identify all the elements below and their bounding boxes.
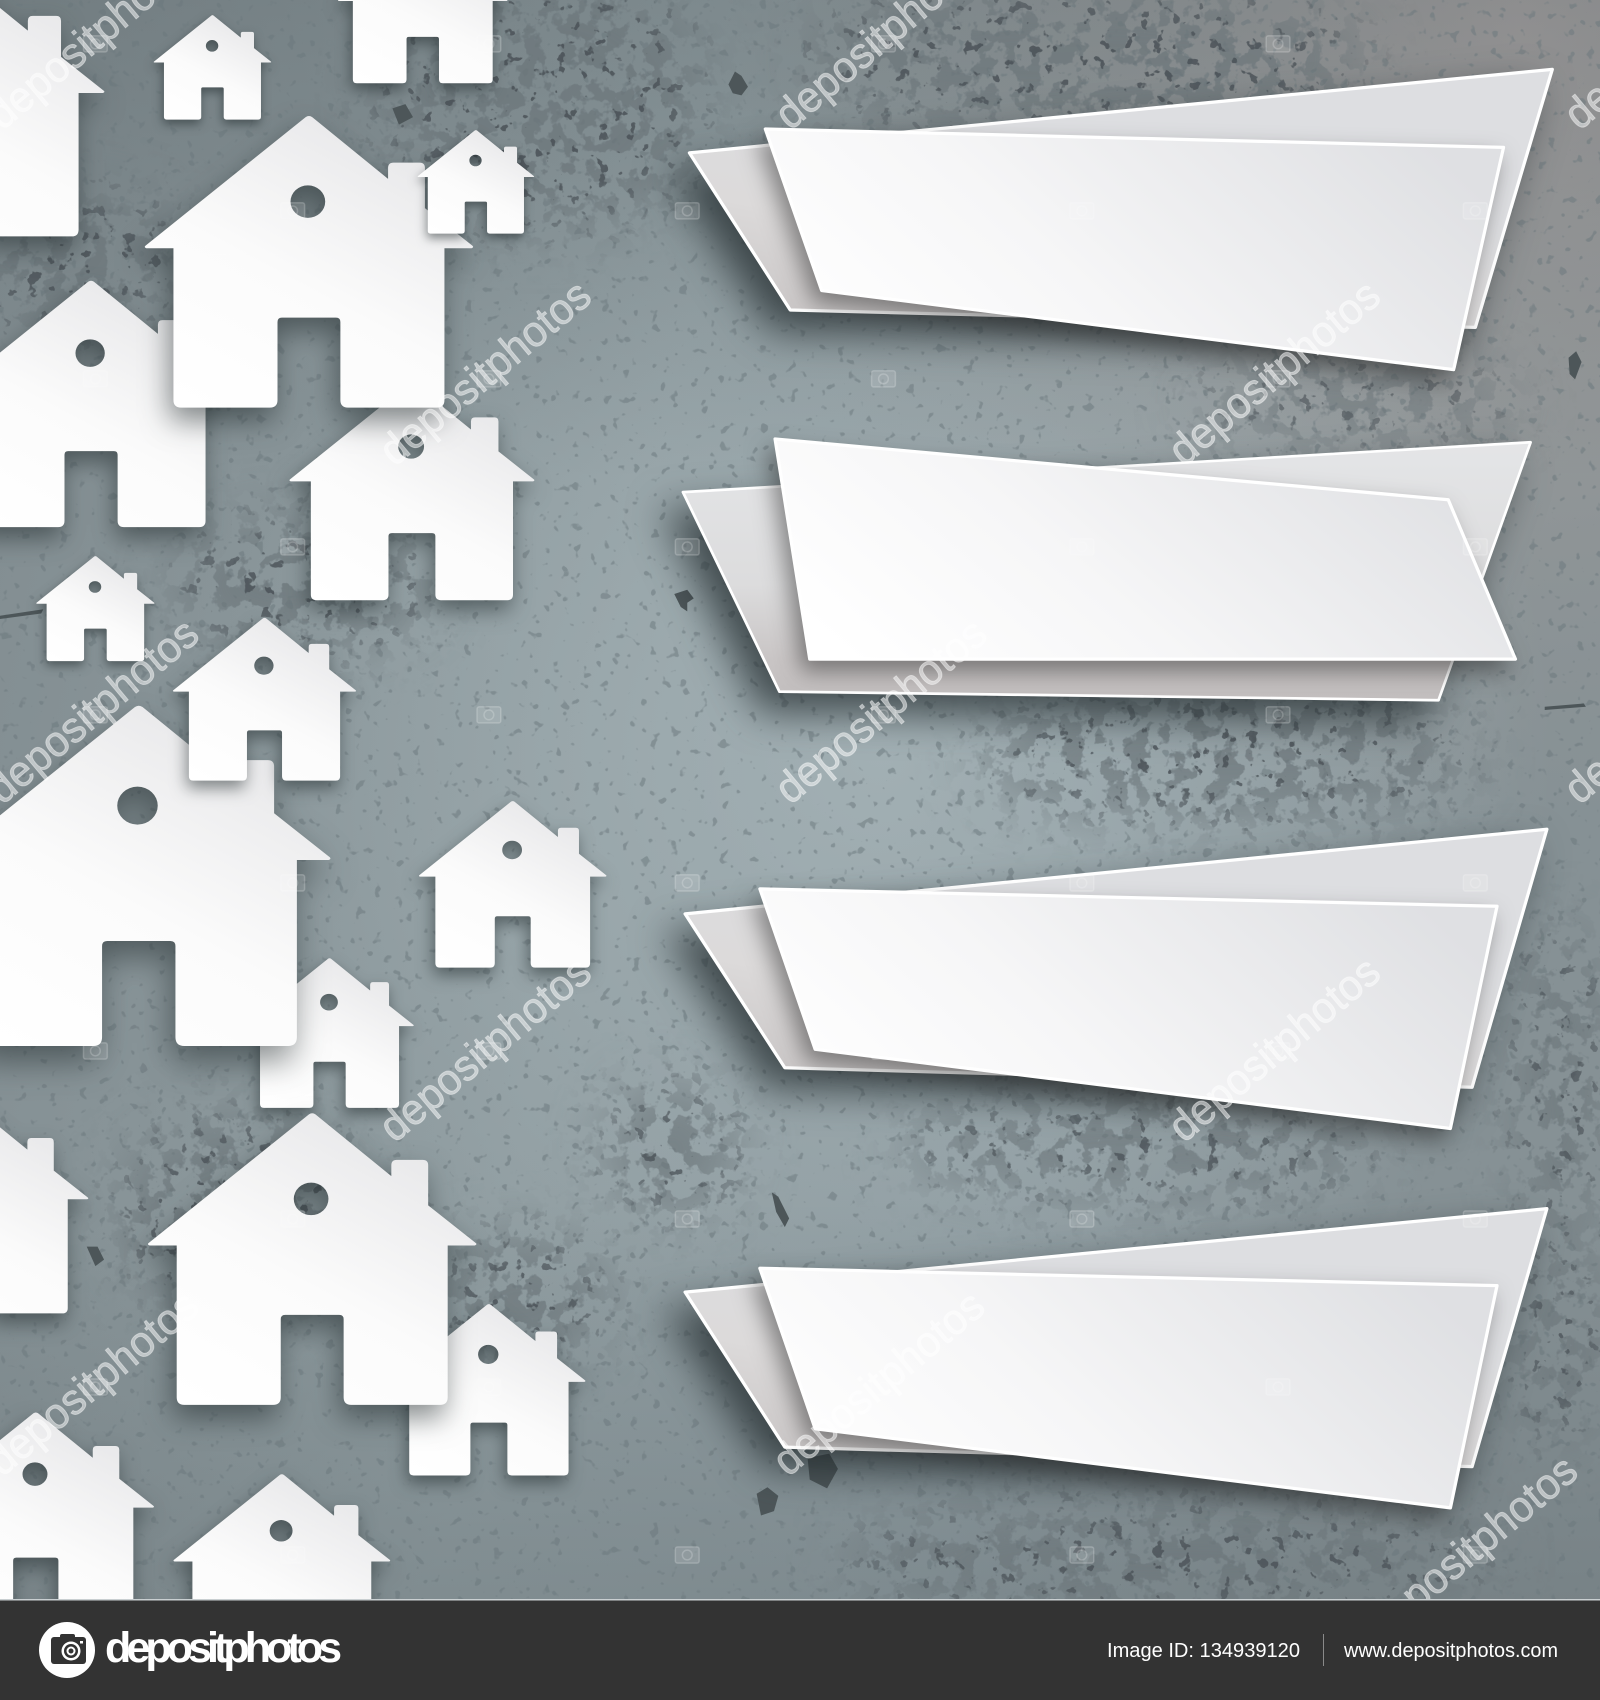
footer bar	[0, 1599, 1600, 1700]
watermark text: depositphotos	[370, 947, 600, 1151]
house: top centre, cropped	[338, 0, 508, 83]
house: bottom centre	[173, 1474, 390, 1667]
banner 1 back sheet	[689, 69, 1552, 327]
house: large lower left	[0, 706, 330, 1046]
image id: Image ID: 134939120	[1107, 1640, 1300, 1662]
banner 4	[685, 1209, 1547, 1508]
logo wordmark: depositphotos	[105, 1624, 342, 1672]
banner 4 front sheet	[760, 1268, 1497, 1508]
house: small left	[36, 556, 155, 661]
banner 3	[685, 829, 1547, 1128]
watermark camera icons	[83, 36, 1487, 1563]
house: small on roof	[418, 130, 534, 234]
icon: camera badge	[39, 1622, 95, 1678]
banner 1 front sheet	[765, 129, 1504, 370]
watermark text: depositphotos	[1159, 947, 1390, 1151]
banner 2	[683, 439, 1531, 700]
banner 4 back sheet	[685, 1209, 1547, 1467]
houses	[0, 0, 607, 1667]
footer logo	[39, 1622, 342, 1678]
house: large bottom	[148, 1113, 476, 1405]
banner 3 front sheet	[760, 889, 1497, 1128]
banner 2 back sheet	[683, 442, 1531, 700]
house: middle right	[289, 383, 534, 600]
watermark text: depositphotos	[764, 1281, 994, 1485]
house: right isolated	[419, 801, 607, 968]
house: small top	[154, 15, 271, 120]
house: left large	[0, 281, 230, 527]
banner 1	[689, 69, 1552, 370]
house: small lower right	[392, 1304, 585, 1476]
watermark text: depositphotos	[1357, 1446, 1587, 1650]
house: bottom left	[0, 1412, 154, 1622]
house: small behind large	[245, 958, 414, 1108]
banner 3 back sheet	[685, 829, 1547, 1087]
website: www.depositphotos.com	[1343, 1640, 1558, 1662]
watermark text: depositphotos	[370, 271, 600, 475]
watermark text: depositphotos	[1159, 271, 1390, 475]
house: medium on large	[173, 618, 356, 781]
watermark text: depositphotos	[766, 609, 996, 813]
house: left cropped	[0, 1105, 88, 1313]
house: largest upper	[145, 116, 473, 408]
house: top left, cropped	[0, 0, 104, 236]
banner 2 front sheet	[775, 439, 1515, 659]
